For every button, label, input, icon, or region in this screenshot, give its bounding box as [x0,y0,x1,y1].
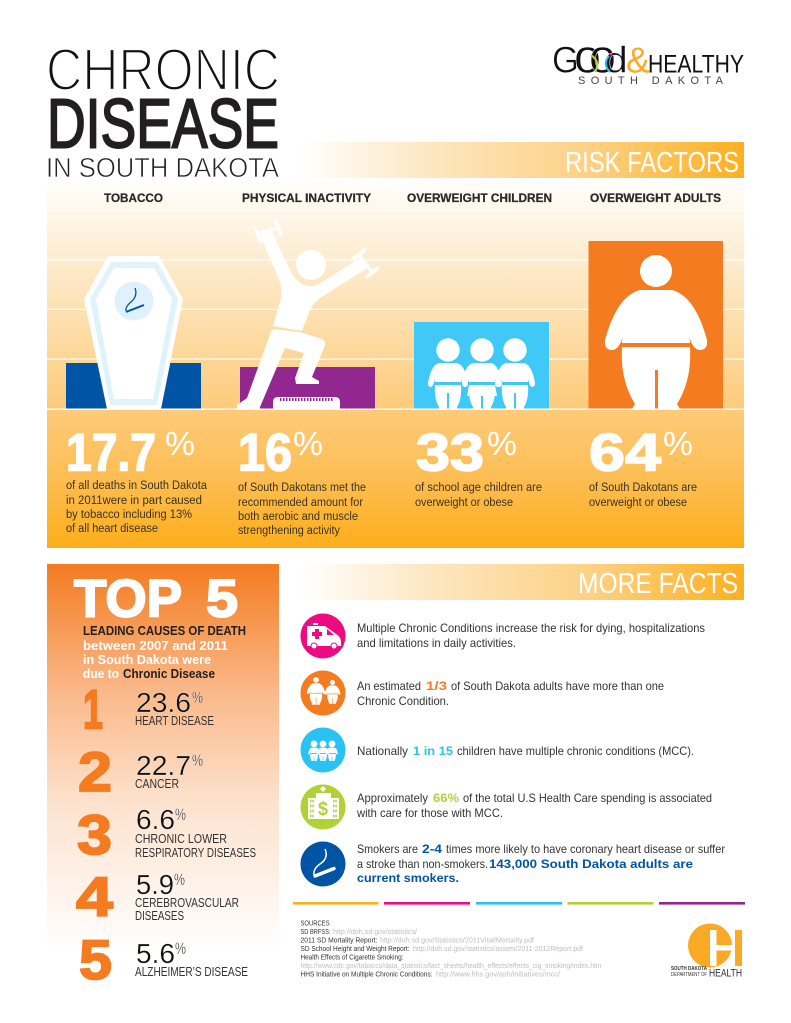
cause 5: alzheimer's disease: % [175,939,186,958]
fact 5 text: times more likely to have coronary heart disease or suffer [446,842,725,856]
intro text: LEADING CAUSES OF DEATH [83,624,246,638]
sources: SD BRFSS: [300,929,331,936]
stat: tobacco [66,424,208,535]
icon: two overweight adults [300,670,346,716]
cause 3: chronic lower respiratory diseases: 3 [77,803,112,866]
baseline rule [47,408,744,410]
sources: http://doh.sd.gov/statistics/assets/2011-2012Report.pdf [413,946,583,953]
sources [300,920,602,978]
cause 4: cerebrovascular diseases: CEREBROVASCULAR [135,895,239,910]
cause 1: heart disease: HEART DISEASE [135,713,214,728]
fact 5 text: 143,000 South Dakota adults are [489,857,693,871]
fact 4 text: Approximately [357,791,428,805]
stat: overweight children: overweight or obese [415,497,513,509]
logo: South Dakota Department of Health: HEALTH [709,968,742,980]
cause 4: cerebrovascular diseases: 4 [76,865,113,928]
stat: physical inactivity [238,424,366,537]
stat: overweight adults: of South Dakotans are [589,482,697,494]
icon: hospital with dollar sign: $ [318,799,328,820]
fact 1 text: Multiple Chronic Conditions increase the risk for dying, hospitalizations [357,621,705,635]
stat: overweight children: % [487,425,517,462]
stat: overweight children: 33 [416,424,484,482]
column headings: TOBACCO [104,191,163,205]
cause 2: cancer: % [192,751,203,770]
cause 3: chronic lower respiratory diseases [77,803,256,866]
sources: http://www.hhs.gov/ash/initiatives/mcc/ [436,972,560,978]
sources: SD School Height and Weight Report: [300,946,410,953]
column headings: OVERWEIGHT ADULTS [590,191,721,205]
risk factors banner: RISK FACTORS [565,147,739,179]
logo: Good and Healthy South Dakota: o [589,30,616,82]
sources: http://doh.sd.gov/statistics/ [333,929,417,936]
stat: tobacco: by tobacco including 13% [66,509,192,521]
sources: http://doh.sd.gov/Statistics/2011Vital/Mortality.pdf [380,938,534,944]
title: DISEASE [47,84,279,162]
more facts banner: MORE FACTS [578,568,738,600]
heading: top 5: TOP [74,570,182,628]
stat: tobacco: of all heart disease [66,523,158,535]
cause 2: cancer: 2 [78,740,112,803]
logo: South Dakota Department of Health: DEPARTMENT OF [671,972,707,978]
fact 2 text: 1/3 [426,679,447,693]
cause 4: cerebrovascular diseases [76,865,239,928]
cause 2: cancer: 22.7 [136,750,191,781]
stat: physical inactivity: % [293,425,323,462]
logo: Good and Healthy South Dakota: o [574,30,601,82]
title: IN SOUTH DAKOTA [46,152,279,183]
cause 4: cerebrovascular diseases: 5.9 [136,869,174,900]
title: CHRONIC [46,37,280,103]
logo: South Dakota Department of Health [671,924,742,980]
cause 1: heart disease [83,678,214,740]
icon: overweight adult [605,255,707,409]
fact 4 text: 66% [433,791,459,805]
intro text: due to [83,667,119,681]
stat: physical inactivity: both aerobic and muscle [238,511,358,523]
icon: ambulance [300,614,346,658]
sources: 2011 SD Mortality Report: [300,938,378,944]
stat: tobacco: 17.7 [66,424,156,482]
cause 1: heart disease: 1 [83,678,103,740]
bar: overweight children [414,322,549,409]
fact 4 text: with care for those with MCC. [356,806,503,820]
logo: Good and Healthy South Dakota: G [552,40,579,80]
cause 2: cancer: CANCER [135,776,179,791]
stat: physical inactivity: of South Dakotans met the [238,482,366,494]
intro text: Chronic Disease [123,667,215,681]
cause 1: heart disease: 23.6 [136,687,191,718]
sources: SOURCES [300,920,330,928]
cause 5: alzheimer's disease: 5 [79,928,112,991]
sources: Health Effects of Cigarette Smoking: [300,954,404,962]
fact 2 text: Chronic Condition. [357,694,449,708]
fact 2 text: An estimated [357,679,421,693]
fact 1 text: and limitations in daily activities. [357,636,516,650]
cause 2: cancer [78,740,203,803]
more facts banner [300,564,744,600]
stat: overweight adults: % [663,425,693,462]
logo: Good and Healthy South Dakota: d [604,40,628,80]
stat: physical inactivity: recommended amount for [238,497,363,509]
logo: Good and Healthy South Dakota [552,30,744,87]
icon: coffin with cigarette [84,256,183,409]
stat: physical inactivity: 16 [238,424,292,482]
panel: risk factors [47,180,744,548]
intro text: in South Dakota were [83,653,211,667]
cause 3: chronic lower respiratory diseases: RESPIRATORY DISEASES [135,845,256,860]
logo: South Dakota Department of Health: SOUTH DAKOTA [671,966,707,972]
bar: overweight adults [588,241,723,409]
cause 4: cerebrovascular diseases: DISEASES [135,908,184,923]
icon: three children [300,728,346,772]
stat: overweight adults: overweight or obese [589,497,687,509]
risk factors banner [300,142,744,179]
column headings: PHYSICAL INACTIVITY [242,191,371,205]
title [46,37,280,183]
fact 5 text: 2-4 [422,842,442,856]
cause 3: chronic lower respiratory diseases: CHRONIC LOWER [135,831,227,846]
stat: overweight adults: 64 [589,424,662,482]
fact 5 text: a stroke than non-smokers. [357,857,488,871]
icon: hospital with dollar sign [300,784,346,830]
icon: three overweight children [428,338,535,409]
colour divider [293,902,745,905]
stat: overweight children: of school age children are [415,482,542,494]
stat: overweight adults [589,424,697,509]
column headings [104,191,721,205]
stat: physical inactivity: strengthening activity [238,525,340,537]
column headings: OVERWEIGHT CHILDREN [407,191,552,205]
stat: tobacco: in 2011were in part caused [66,495,202,507]
logo: Good and Healthy South Dakota: HEALTHY [648,50,744,78]
sources: http://www.cdc.gov/tobacco/data_statistics/fact_sheets/health_effects/effects_cig_smoking/index.htm [300,963,602,970]
sources: HHS Initiative on Multiple Chronic Conditions: [300,972,433,978]
cause 4: cerebrovascular diseases: % [174,870,185,889]
cause 3: chronic lower respiratory diseases: % [175,805,186,824]
cause 3: chronic lower respiratory diseases: 6.6 [136,804,175,835]
heading: top 5: 5 [206,570,238,628]
bar: tobacco [66,363,201,409]
logo: Good and Healthy South Dakota: SOUTH DAKOTA [578,75,724,87]
fact 4 text: of the total U.S Health Care spending is associated [463,791,712,805]
cause 5: alzheimer's disease [79,928,248,991]
icon: person exercising on step [237,221,378,409]
cause 5: alzheimer's disease: 5.6 [136,938,175,969]
stat: overweight children [415,424,542,509]
fact 5 text: Smokers are [357,842,418,856]
intro text: between 2007 and 2011 [83,639,228,653]
fact 3 text: Nationally [357,744,408,758]
cause 5: alzheimer's disease: ALZHEIMER’S DISEASE [135,964,248,979]
fact 5 text: current smokers. [357,871,459,885]
bar: physical inactivity [240,367,375,409]
panel: top 5 causes of death [47,564,279,991]
fact 1 text [357,621,705,650]
fact 3 text: 1 in 15 [413,744,453,758]
cause 1: heart disease: % [192,688,203,707]
intro text [83,624,246,681]
stat: tobacco: % [165,425,195,462]
stat: tobacco: of all deaths in South Dakota [66,480,208,492]
fact 3 text: children have multiple chronic conditions (MCC). [457,744,694,758]
logo: Good and Healthy South Dakota: & [626,40,650,80]
fact 2 text: of South Dakota adults have more than one [451,679,664,693]
icon: cigarette [300,842,346,886]
